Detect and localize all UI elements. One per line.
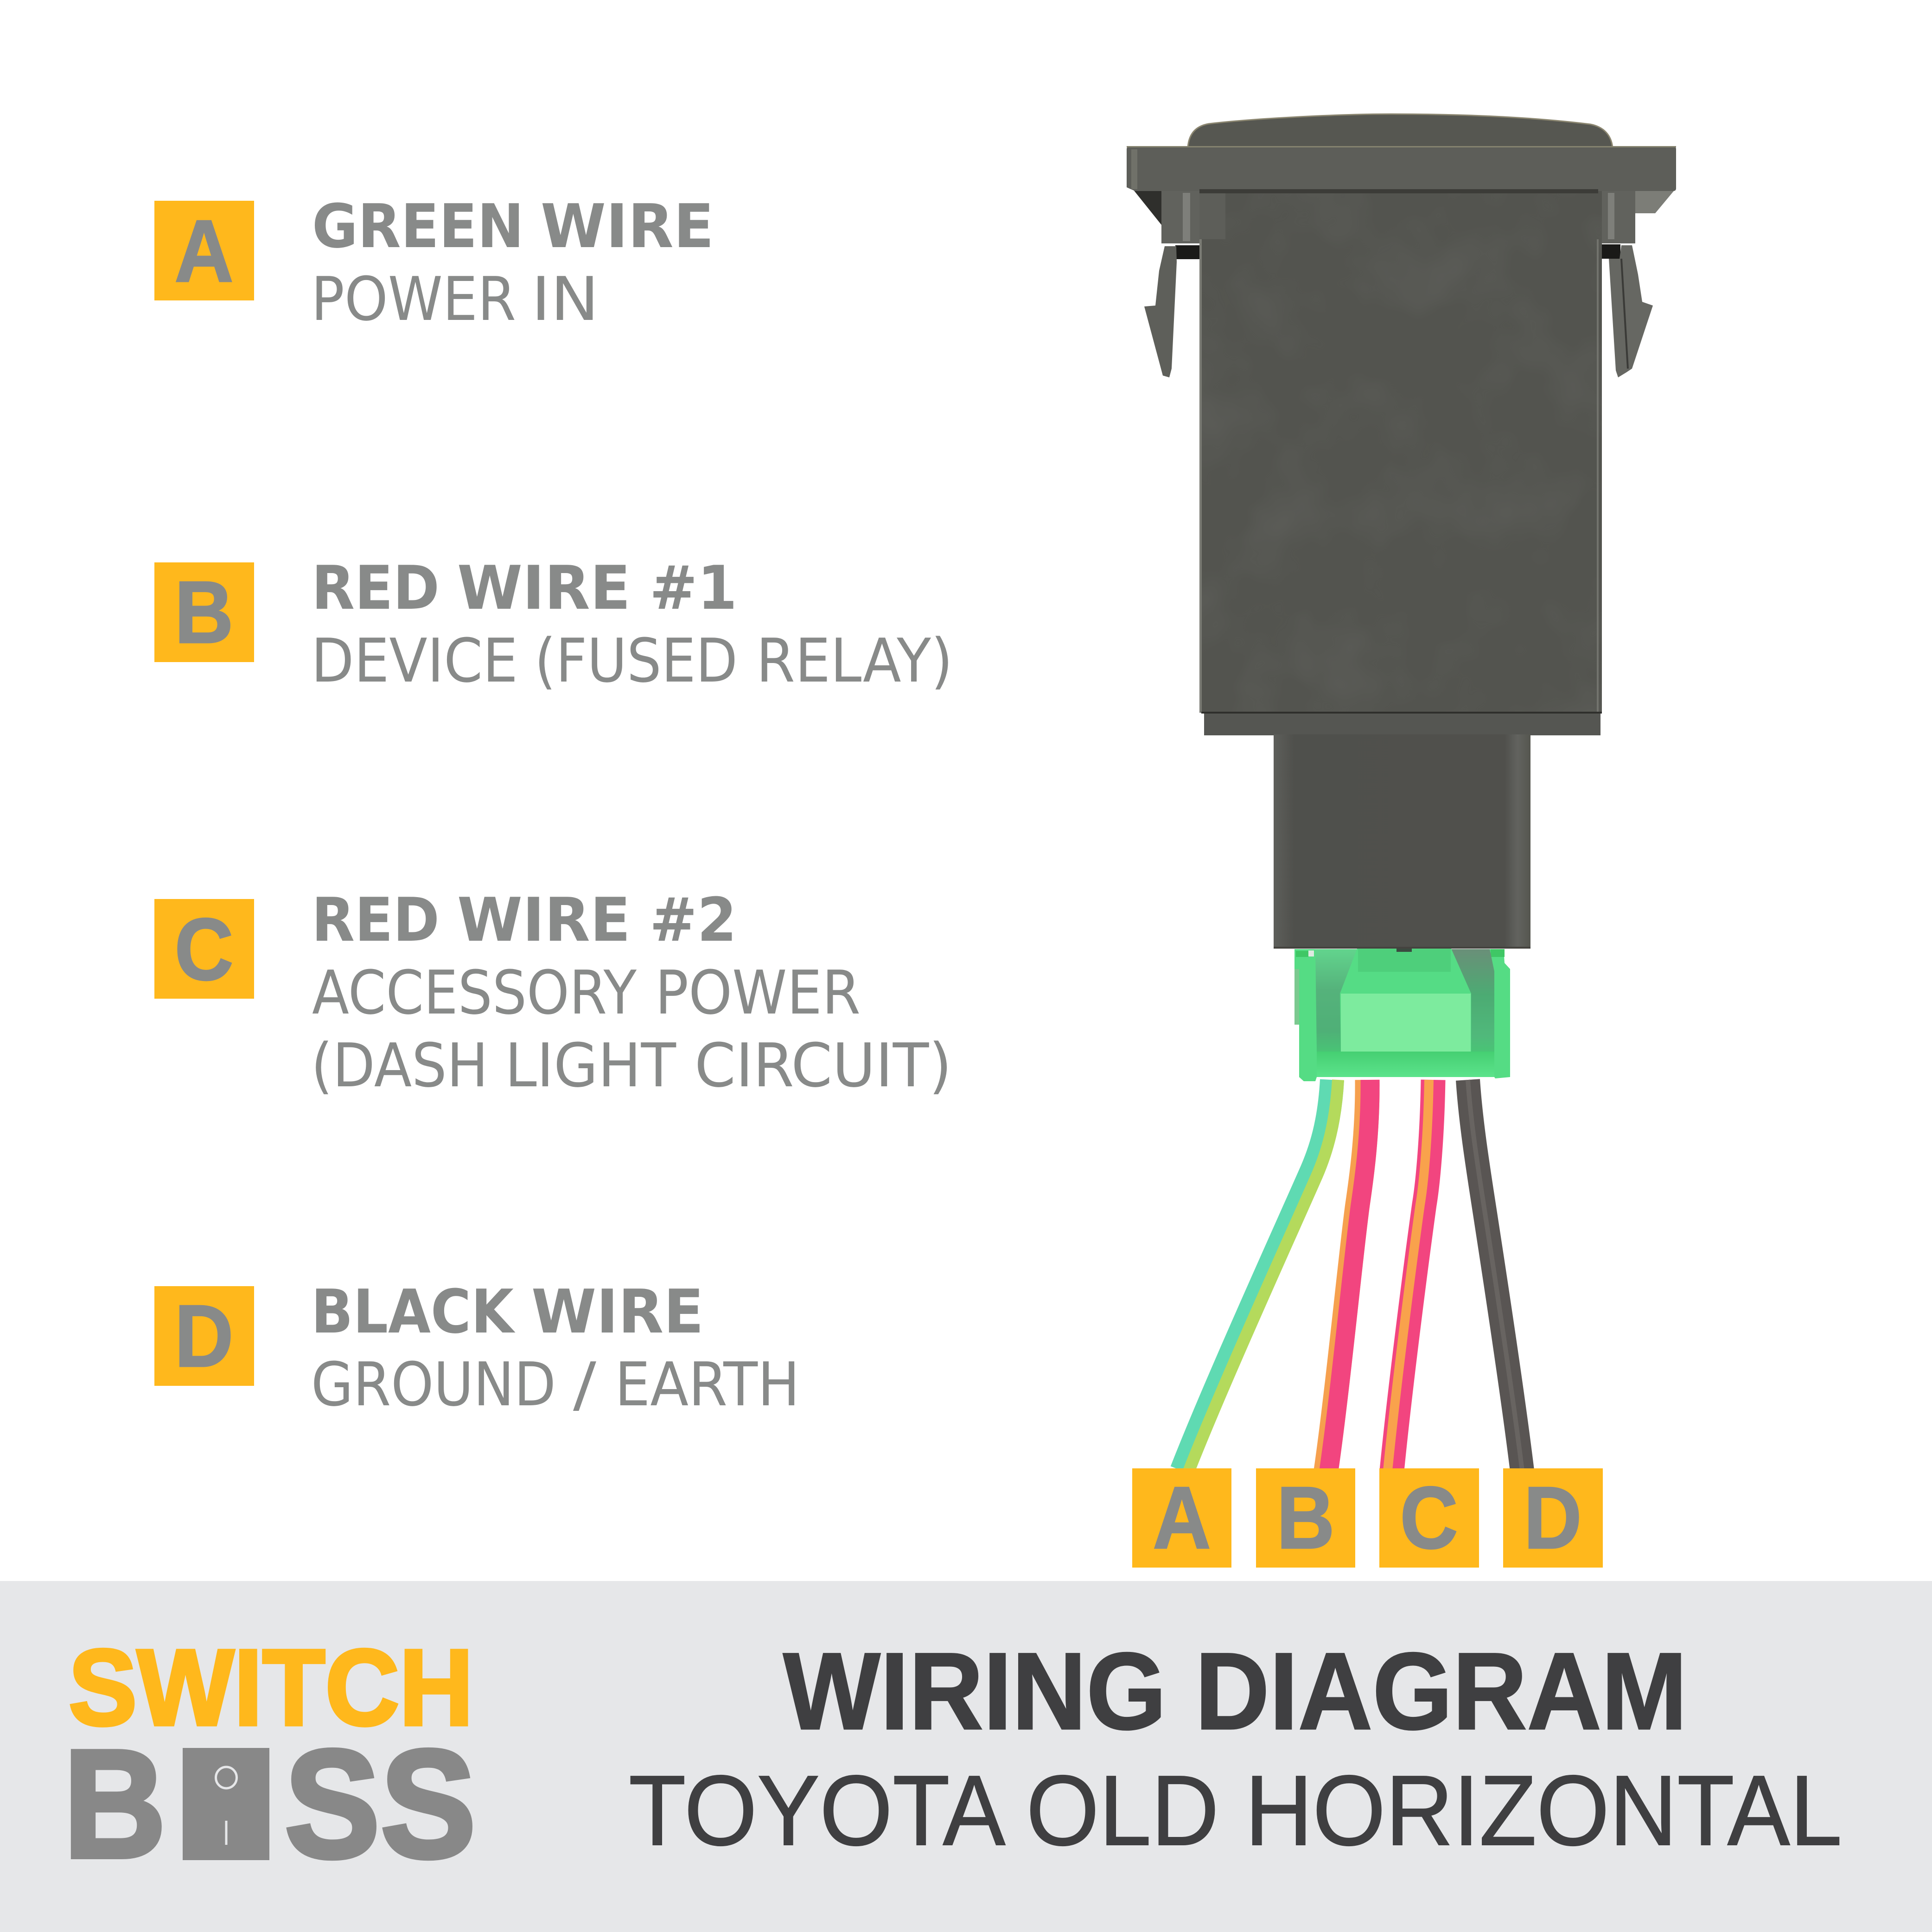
left post highlight — [1183, 193, 1190, 241]
badge D: D — [1524, 1469, 1582, 1567]
description: device: (FUSED — [535, 625, 738, 696]
description: dash light circuit: (DASH — [311, 1030, 488, 1101]
logo letters SS: SS — [285, 1718, 476, 1889]
description: dash light circuit: LIGHT — [505, 1030, 676, 1101]
right latch inner line — [1621, 259, 1628, 369]
description: accessory power: ACCESSORY — [312, 957, 637, 1028]
heading: red wire 1: #1 — [650, 553, 737, 623]
badge C: C — [174, 900, 234, 999]
heading: green wire: WIRE — [541, 191, 714, 261]
badge C: C — [1400, 1469, 1458, 1567]
description: power in: IN — [531, 264, 599, 334]
legend item D: black wire — [154, 1276, 800, 1420]
heading: red wire 1: RED — [312, 553, 440, 623]
badge D: D — [174, 1287, 234, 1385]
legend item C: red wire 2 — [154, 885, 952, 1101]
raised block front — [1341, 994, 1471, 1052]
left pale edge — [1294, 969, 1299, 1025]
main body — [1199, 191, 1602, 713]
switch product — [1127, 114, 1676, 949]
upper body tab — [1199, 193, 1225, 239]
right latch dark gap — [1602, 244, 1620, 259]
bottom shaded strip — [1317, 1052, 1494, 1077]
wire D: black — [1468, 1080, 1522, 1471]
badge B: B — [1277, 1469, 1334, 1567]
right post highlight — [1608, 193, 1614, 239]
trapezoid inset — [1358, 949, 1451, 972]
heading: black wire: WIRE — [531, 1276, 704, 1347]
left latch dark gap — [1175, 245, 1199, 259]
badge B — [154, 562, 254, 662]
footer band — [0, 1581, 1932, 1932]
body left edge — [1199, 239, 1202, 712]
heading: green wire — [312, 191, 714, 261]
icon: rocker switch as letter O — [183, 1748, 269, 1860]
connector outer shell — [1294, 949, 1510, 1081]
description: device: DEVICE — [311, 625, 518, 696]
switch button top — [1188, 114, 1613, 147]
legend item A: green wire — [154, 191, 714, 334]
logo letter B: B — [64, 1718, 166, 1890]
heading: black wire — [311, 1276, 704, 1347]
description: dash light circuit: CIRCUIT) — [695, 1030, 952, 1101]
heading: red wire 2 — [312, 885, 737, 955]
body right edge — [1597, 239, 1599, 712]
wire B: red — [1326, 1080, 1370, 1471]
right tab top — [1491, 949, 1505, 957]
footer background — [0, 1581, 1932, 1932]
right latch post — [1600, 189, 1635, 243]
left latch post — [1161, 189, 1203, 243]
badge D — [154, 1286, 254, 1386]
heading: red wire 1 — [312, 553, 737, 623]
left latch arrow — [1144, 246, 1177, 377]
description: ground: / — [573, 1349, 596, 1420]
title: wiring diagram: WIRING DIAGRAM — [783, 1630, 1687, 1753]
logo word SWITCH: SWITCH — [69, 1627, 473, 1748]
left tab top — [1296, 951, 1309, 957]
badge A — [1132, 1468, 1231, 1568]
left channel — [1315, 949, 1357, 1052]
heading: red wire 1: WIRE — [457, 553, 631, 623]
lip seam — [1201, 712, 1602, 714]
green connector — [1294, 949, 1510, 1081]
right latch arrow — [1609, 245, 1653, 377]
heading: red wire 2: WIRE — [457, 885, 631, 955]
description: device — [311, 625, 953, 696]
badge A — [154, 201, 254, 300]
raised trapezoid — [1340, 949, 1471, 994]
block bottom edge — [1274, 947, 1530, 949]
flange shadow — [1199, 189, 1598, 193]
badge D — [1503, 1468, 1603, 1568]
body lip — [1204, 713, 1600, 735]
right flange underside — [1632, 191, 1674, 213]
wires bundle — [1182, 1080, 1522, 1473]
heading: green wire: GREEN — [312, 191, 524, 261]
description: ground: EARTH — [615, 1349, 800, 1420]
badge C — [154, 899, 254, 999]
badge B — [1256, 1468, 1355, 1568]
flange left highlight — [1131, 149, 1137, 189]
legend item B: red wire 1 — [154, 553, 953, 696]
heading: black wire: BLACK — [311, 1276, 516, 1347]
description: dash light circuit — [311, 1030, 952, 1101]
subtitle: toyota old horizontal: TOYOTA OLD HORIZONTAL — [629, 1754, 1842, 1866]
lower block — [1274, 734, 1530, 949]
left clip shadow — [1134, 190, 1161, 225]
left white speck — [1308, 950, 1314, 956]
description: power in: POWER — [311, 264, 516, 334]
badge C — [1379, 1468, 1479, 1568]
heading: red wire 2: #2 — [650, 885, 737, 955]
right channel — [1451, 949, 1494, 1052]
badge A: A — [174, 202, 234, 300]
flange top edge — [1127, 146, 1676, 147]
wire C: red and orange — [1388, 1080, 1433, 1471]
dark notch — [1396, 949, 1412, 952]
description: accessory power — [312, 957, 861, 1028]
logo: switch boss — [64, 1627, 476, 1890]
flange — [1127, 147, 1676, 191]
heading: red wire 2: RED — [312, 885, 440, 955]
badge A: A — [1153, 1469, 1211, 1567]
body mottling — [1199, 191, 1602, 713]
description: ground — [311, 1349, 800, 1420]
description: ground: GROUND — [311, 1349, 556, 1420]
description: accessory power: POWER — [655, 957, 861, 1028]
wire A: green — [1182, 1080, 1338, 1473]
badge B: B — [174, 563, 234, 662]
description: device: RELAY) — [756, 625, 953, 696]
bottom wire badges — [1132, 1468, 1603, 1568]
